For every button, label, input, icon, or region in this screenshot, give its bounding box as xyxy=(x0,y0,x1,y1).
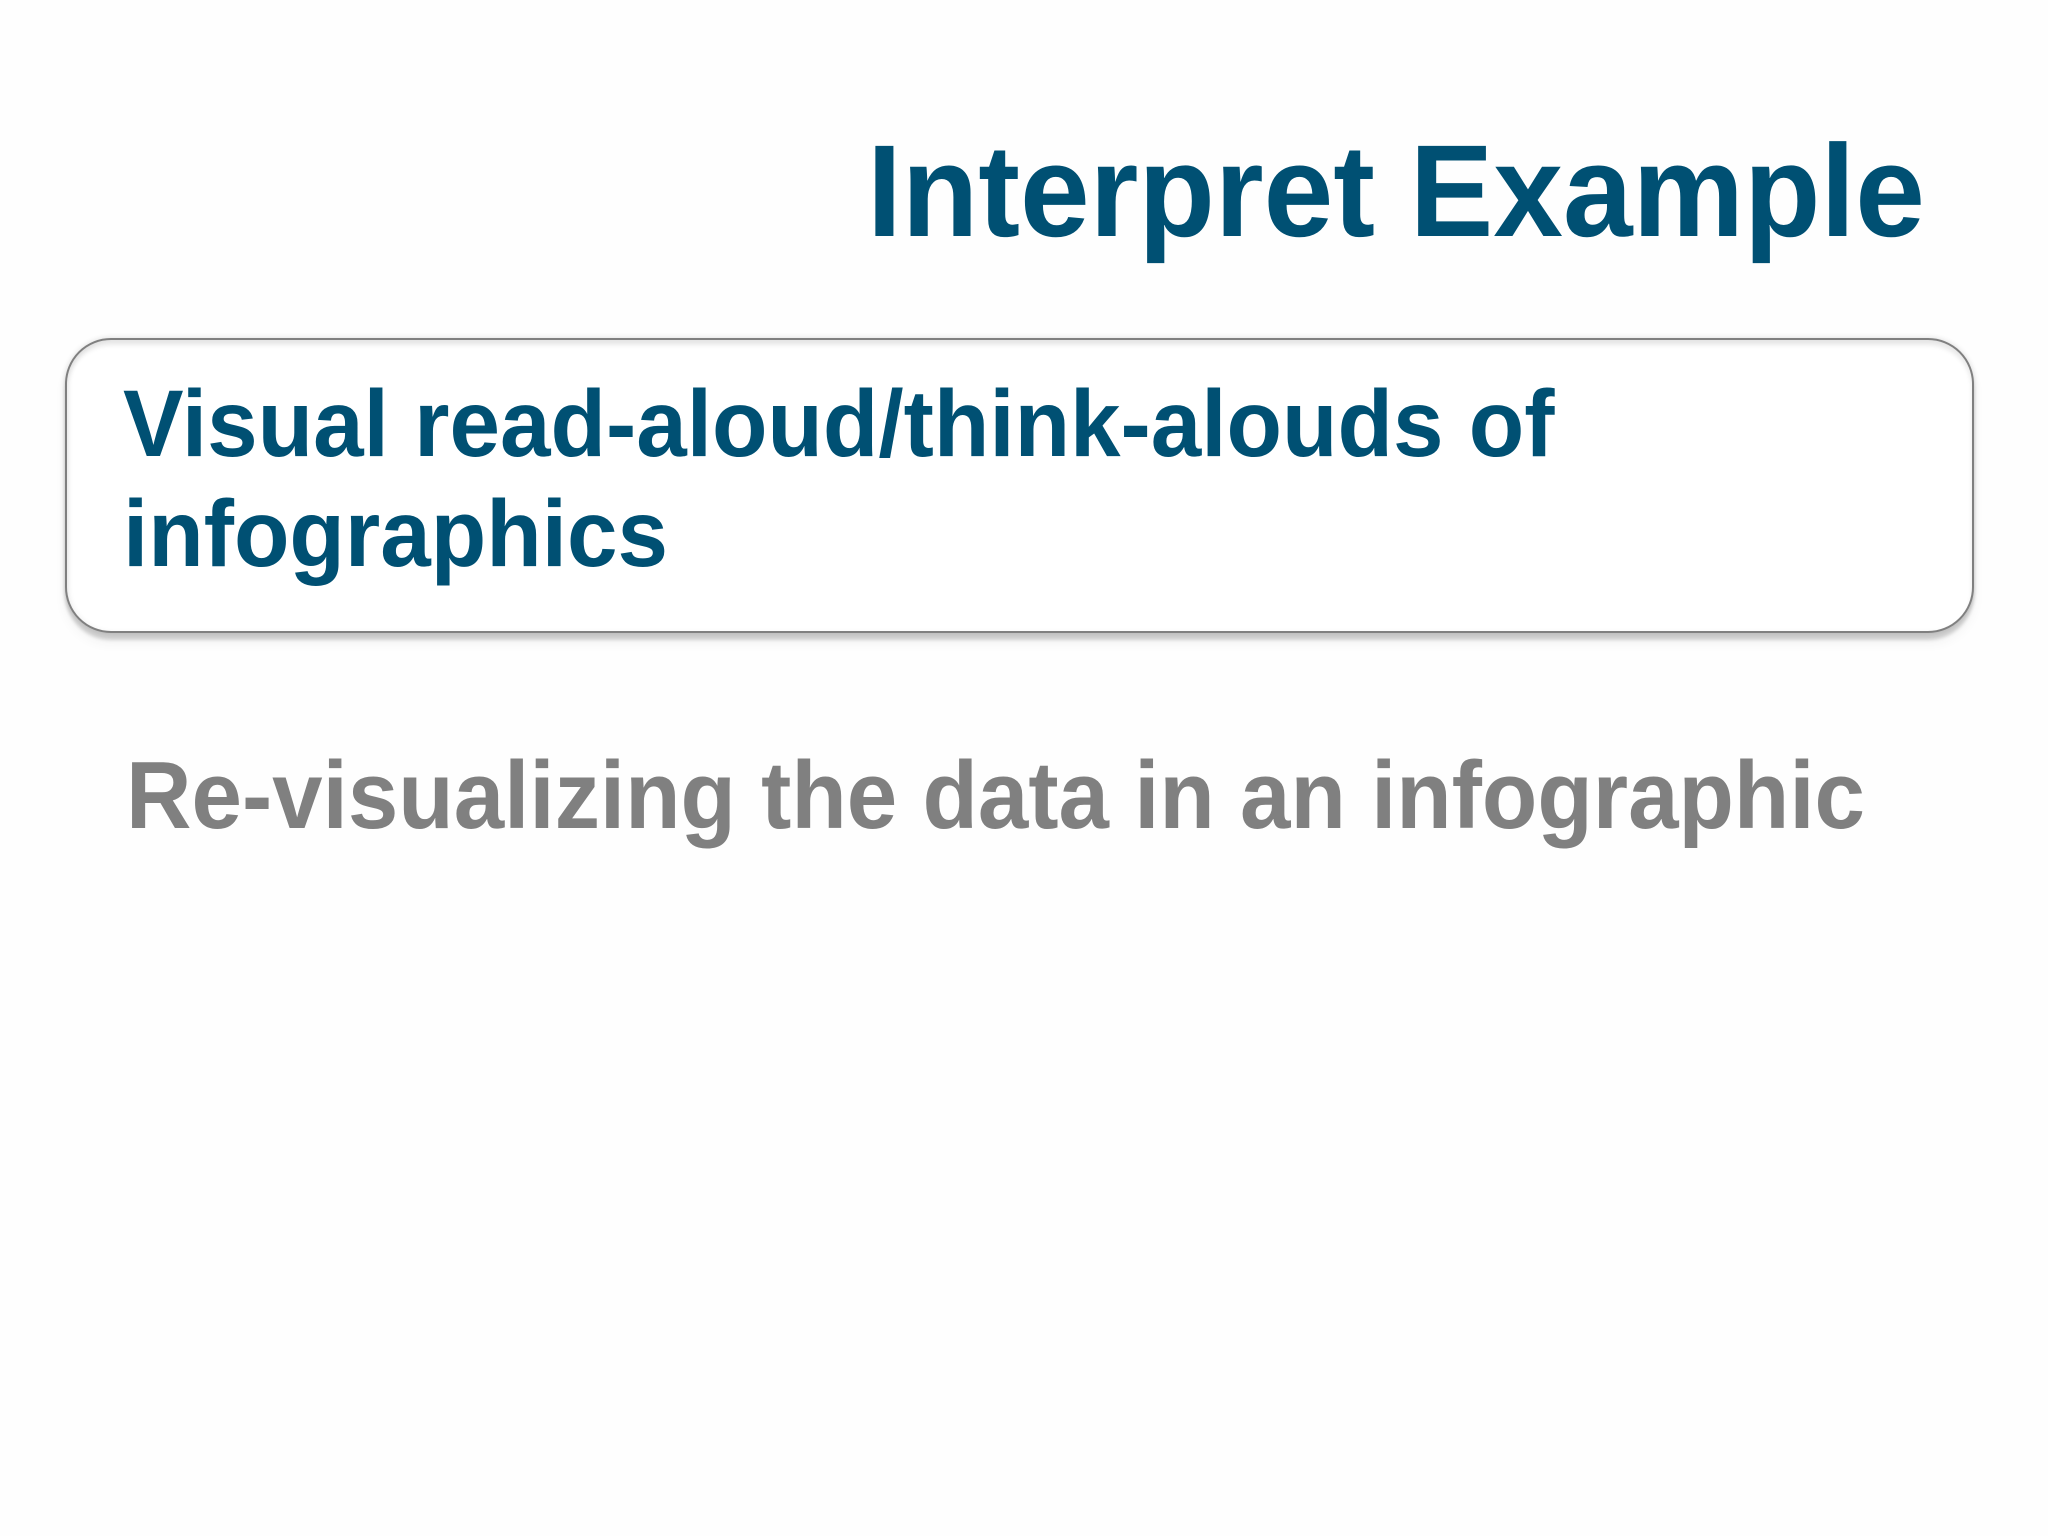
title: Interpret Example xyxy=(867,117,1925,264)
panel text: visual read-aloud xyxy=(123,371,1555,587)
text block: re-visualizing: Re-visualizing the data in an infographic xyxy=(126,742,1865,849)
panel text: visual read-aloud: Visual read-aloud/think-alouds of xyxy=(123,371,1554,477)
panel text: visual read-aloud: infographics xyxy=(123,481,668,587)
panel: highlighted item xyxy=(65,338,1974,633)
